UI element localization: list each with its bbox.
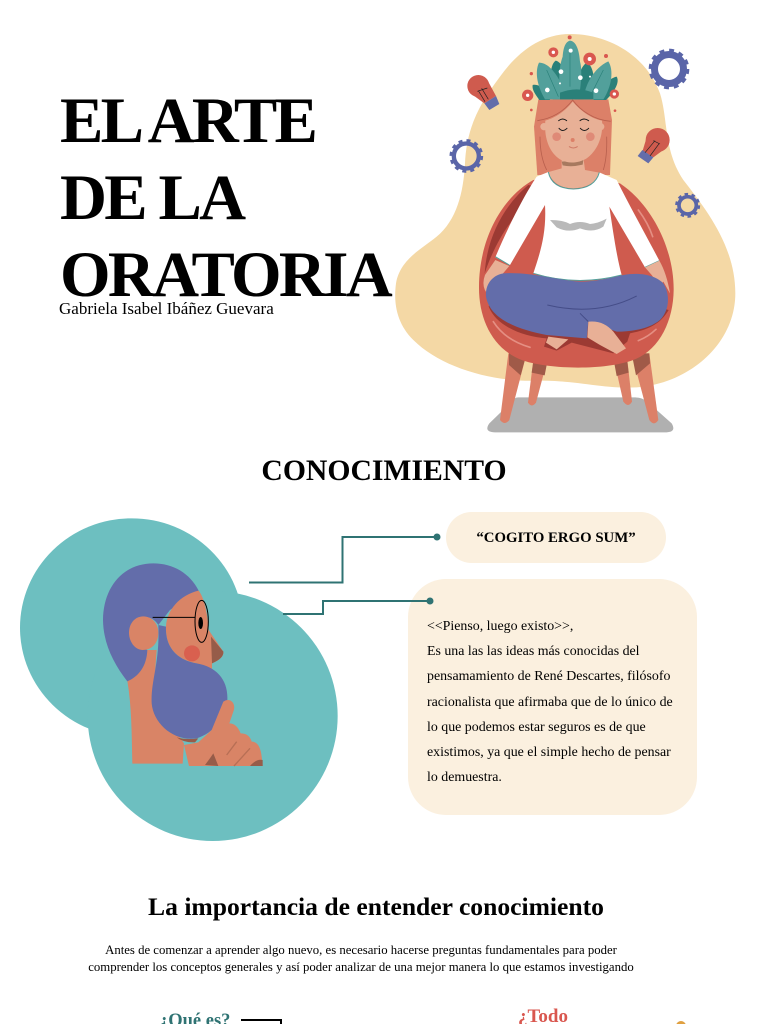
explanation box: racionalista que afirmaba que de lo único de [427, 695, 673, 710]
explanation box [408, 579, 697, 815]
explanation box: <<Pienso, luego existo>>, [427, 619, 573, 634]
intro paragraph [88, 943, 634, 974]
hair [103, 563, 199, 681]
floor shadow [487, 397, 673, 432]
lightbulb right [638, 128, 670, 163]
illustration: meditating woman on chair [395, 34, 735, 432]
illustration: thinking bearded man [20, 518, 338, 841]
hair [534, 99, 612, 175]
beard [152, 625, 227, 739]
yellow blob background [395, 34, 735, 388]
gear large [651, 51, 687, 87]
explanation box: lo que podemos estar seguros es de que [427, 720, 646, 735]
icon: orange fragment [676, 1021, 686, 1024]
intro paragraph: Antes de comenzar a aprender algo nuevo, es necesario hacerse preguntas fundamentales para poder [105, 943, 617, 957]
explanation box: pensamamiento de René Descartes, filósofo [427, 669, 670, 684]
quote pill: “COGITO ERGO SUM” [476, 530, 636, 546]
lightbulb left [467, 75, 499, 110]
gear right [676, 194, 699, 217]
beard shadow [177, 737, 198, 742]
face [166, 591, 223, 670]
quote pill [446, 512, 666, 563]
chair legs [500, 353, 658, 423]
neck and body [127, 650, 184, 764]
teal blobs [20, 518, 243, 737]
blue trousers [486, 273, 668, 338]
neck [549, 157, 599, 188]
intro paragraph: comprender los conceptos generales y así poder analizar de una mejor manera lo que estamos investigando [88, 960, 634, 974]
feet [587, 321, 626, 354]
section heading: conocimiento: CONOCIMIENTO [261, 455, 507, 487]
title: ORATORIA [60, 239, 390, 311]
arms and hands [483, 260, 509, 295]
ear [129, 616, 158, 650]
gear left [451, 141, 482, 171]
connector: to quote pill [249, 534, 440, 582]
white sweater [495, 172, 659, 280]
connector: to explanation box [283, 598, 434, 614]
section heading: importancia: La importancia de entender conocimiento [148, 892, 604, 921]
explanation box: Es una las las ideas más conocidas del [427, 644, 640, 659]
cheek [184, 645, 200, 661]
explanation box: lo demuestra. [427, 770, 502, 785]
explanation box: existimos, ya que el simple hecho de pensar [427, 745, 671, 760]
glasses [153, 600, 208, 642]
sweater fold [550, 219, 607, 231]
title: DE LA [60, 162, 243, 234]
red chair [479, 173, 674, 368]
face [545, 102, 602, 162]
bracket line [241, 1019, 282, 1024]
title [60, 85, 392, 311]
title: EL ARTE [60, 85, 315, 157]
nose shadow [211, 637, 223, 663]
plant crown [522, 35, 619, 112]
author: Gabriela Isabel Ibáñez Guevara [59, 299, 274, 318]
hand [184, 700, 263, 766]
